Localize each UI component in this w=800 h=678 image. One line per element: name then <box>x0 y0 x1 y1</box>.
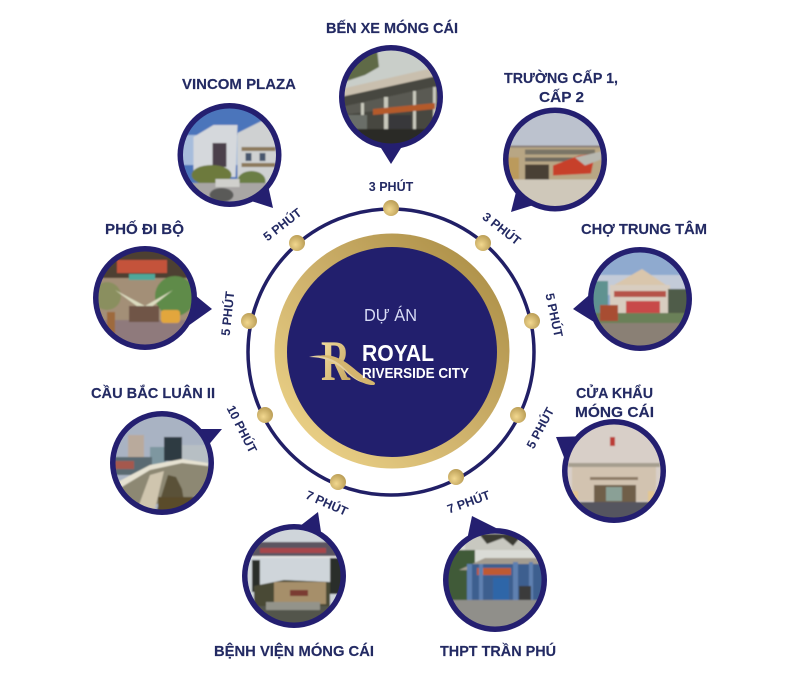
destination titles <box>91 19 707 660</box>
photo <box>594 252 686 346</box>
label: du an: DỰ ÁN <box>364 305 417 325</box>
destination titles: VINCOM PLAZA <box>182 76 296 93</box>
gold ring dots <box>241 200 540 490</box>
travel time labels: 7 PHÚT <box>445 487 492 516</box>
travel time labels: 10 PHÚT <box>224 403 261 456</box>
travel time labels: 5 PHÚT <box>260 205 305 244</box>
bubble: cho trung tam <box>573 247 692 351</box>
center badge: project logo <box>274 234 510 468</box>
photo <box>508 113 602 206</box>
pin <box>188 291 212 326</box>
destination titles: BỆNH VIỆN MÓNG CÁI <box>214 642 374 660</box>
bubble: truong cap 1, cap 2 <box>503 108 607 212</box>
travel time labels: 5 PHÚT <box>542 292 566 339</box>
pin <box>511 180 540 212</box>
bubble: cua khau mong cai <box>556 419 666 523</box>
destination titles: CẤP 2 <box>539 89 584 106</box>
photo <box>183 108 276 202</box>
pin <box>467 516 496 540</box>
pin <box>573 290 595 322</box>
photo <box>344 50 438 144</box>
navy disc <box>287 247 497 457</box>
logo text: riverside city: RIVERSIDE CITY <box>362 365 469 382</box>
destination titles: PHỐ ĐI BỘ <box>105 220 184 238</box>
infographic <box>92 20 706 659</box>
travel time labels: 5 PHÚT <box>523 404 557 451</box>
bubble: ben xe mong cai <box>339 45 443 164</box>
destination titles: MÓNG CÁI <box>575 403 654 421</box>
destination titles: TRƯỜNG CẤP 1, <box>504 69 618 87</box>
photo <box>248 530 340 622</box>
bubble: cau bac luan ii <box>110 411 222 515</box>
destination titles: CẦU BẮC LUÂN II <box>91 384 215 402</box>
pin <box>245 176 273 208</box>
destination titles: BẾN XE MÓNG CÁI <box>326 19 458 37</box>
destination titles: THPT TRẦN PHÚ <box>440 642 556 660</box>
logo mark <box>309 330 375 393</box>
bubble: thpt tran phu <box>443 516 547 632</box>
bubble: pho di bo <box>93 246 212 350</box>
pin <box>556 436 590 465</box>
travel time labels: 5 PHÚT <box>218 290 237 336</box>
travel time labels: 7 PHÚT <box>303 487 351 519</box>
travel time labels <box>218 179 566 519</box>
logo text: royal: ROYAL <box>362 340 434 366</box>
destination titles: CỬA KHẨU <box>576 384 653 402</box>
gold ring <box>274 234 510 468</box>
pin <box>300 512 321 532</box>
pin <box>376 140 406 164</box>
bubble: vincom plaza <box>178 103 282 208</box>
bubble: benh vien mong cai <box>242 512 346 628</box>
photo <box>116 416 208 510</box>
travel time labels: 3 PHÚT <box>369 179 414 194</box>
ring connecting the destinations <box>248 209 534 495</box>
logo mark: R <box>321 330 351 393</box>
photo <box>448 534 542 626</box>
photo <box>568 424 660 518</box>
travel time labels: 3 PHÚT <box>480 209 524 248</box>
destination titles: CHỢ TRUNG TÂM <box>581 220 707 238</box>
pin <box>190 429 222 448</box>
photo <box>98 252 192 344</box>
